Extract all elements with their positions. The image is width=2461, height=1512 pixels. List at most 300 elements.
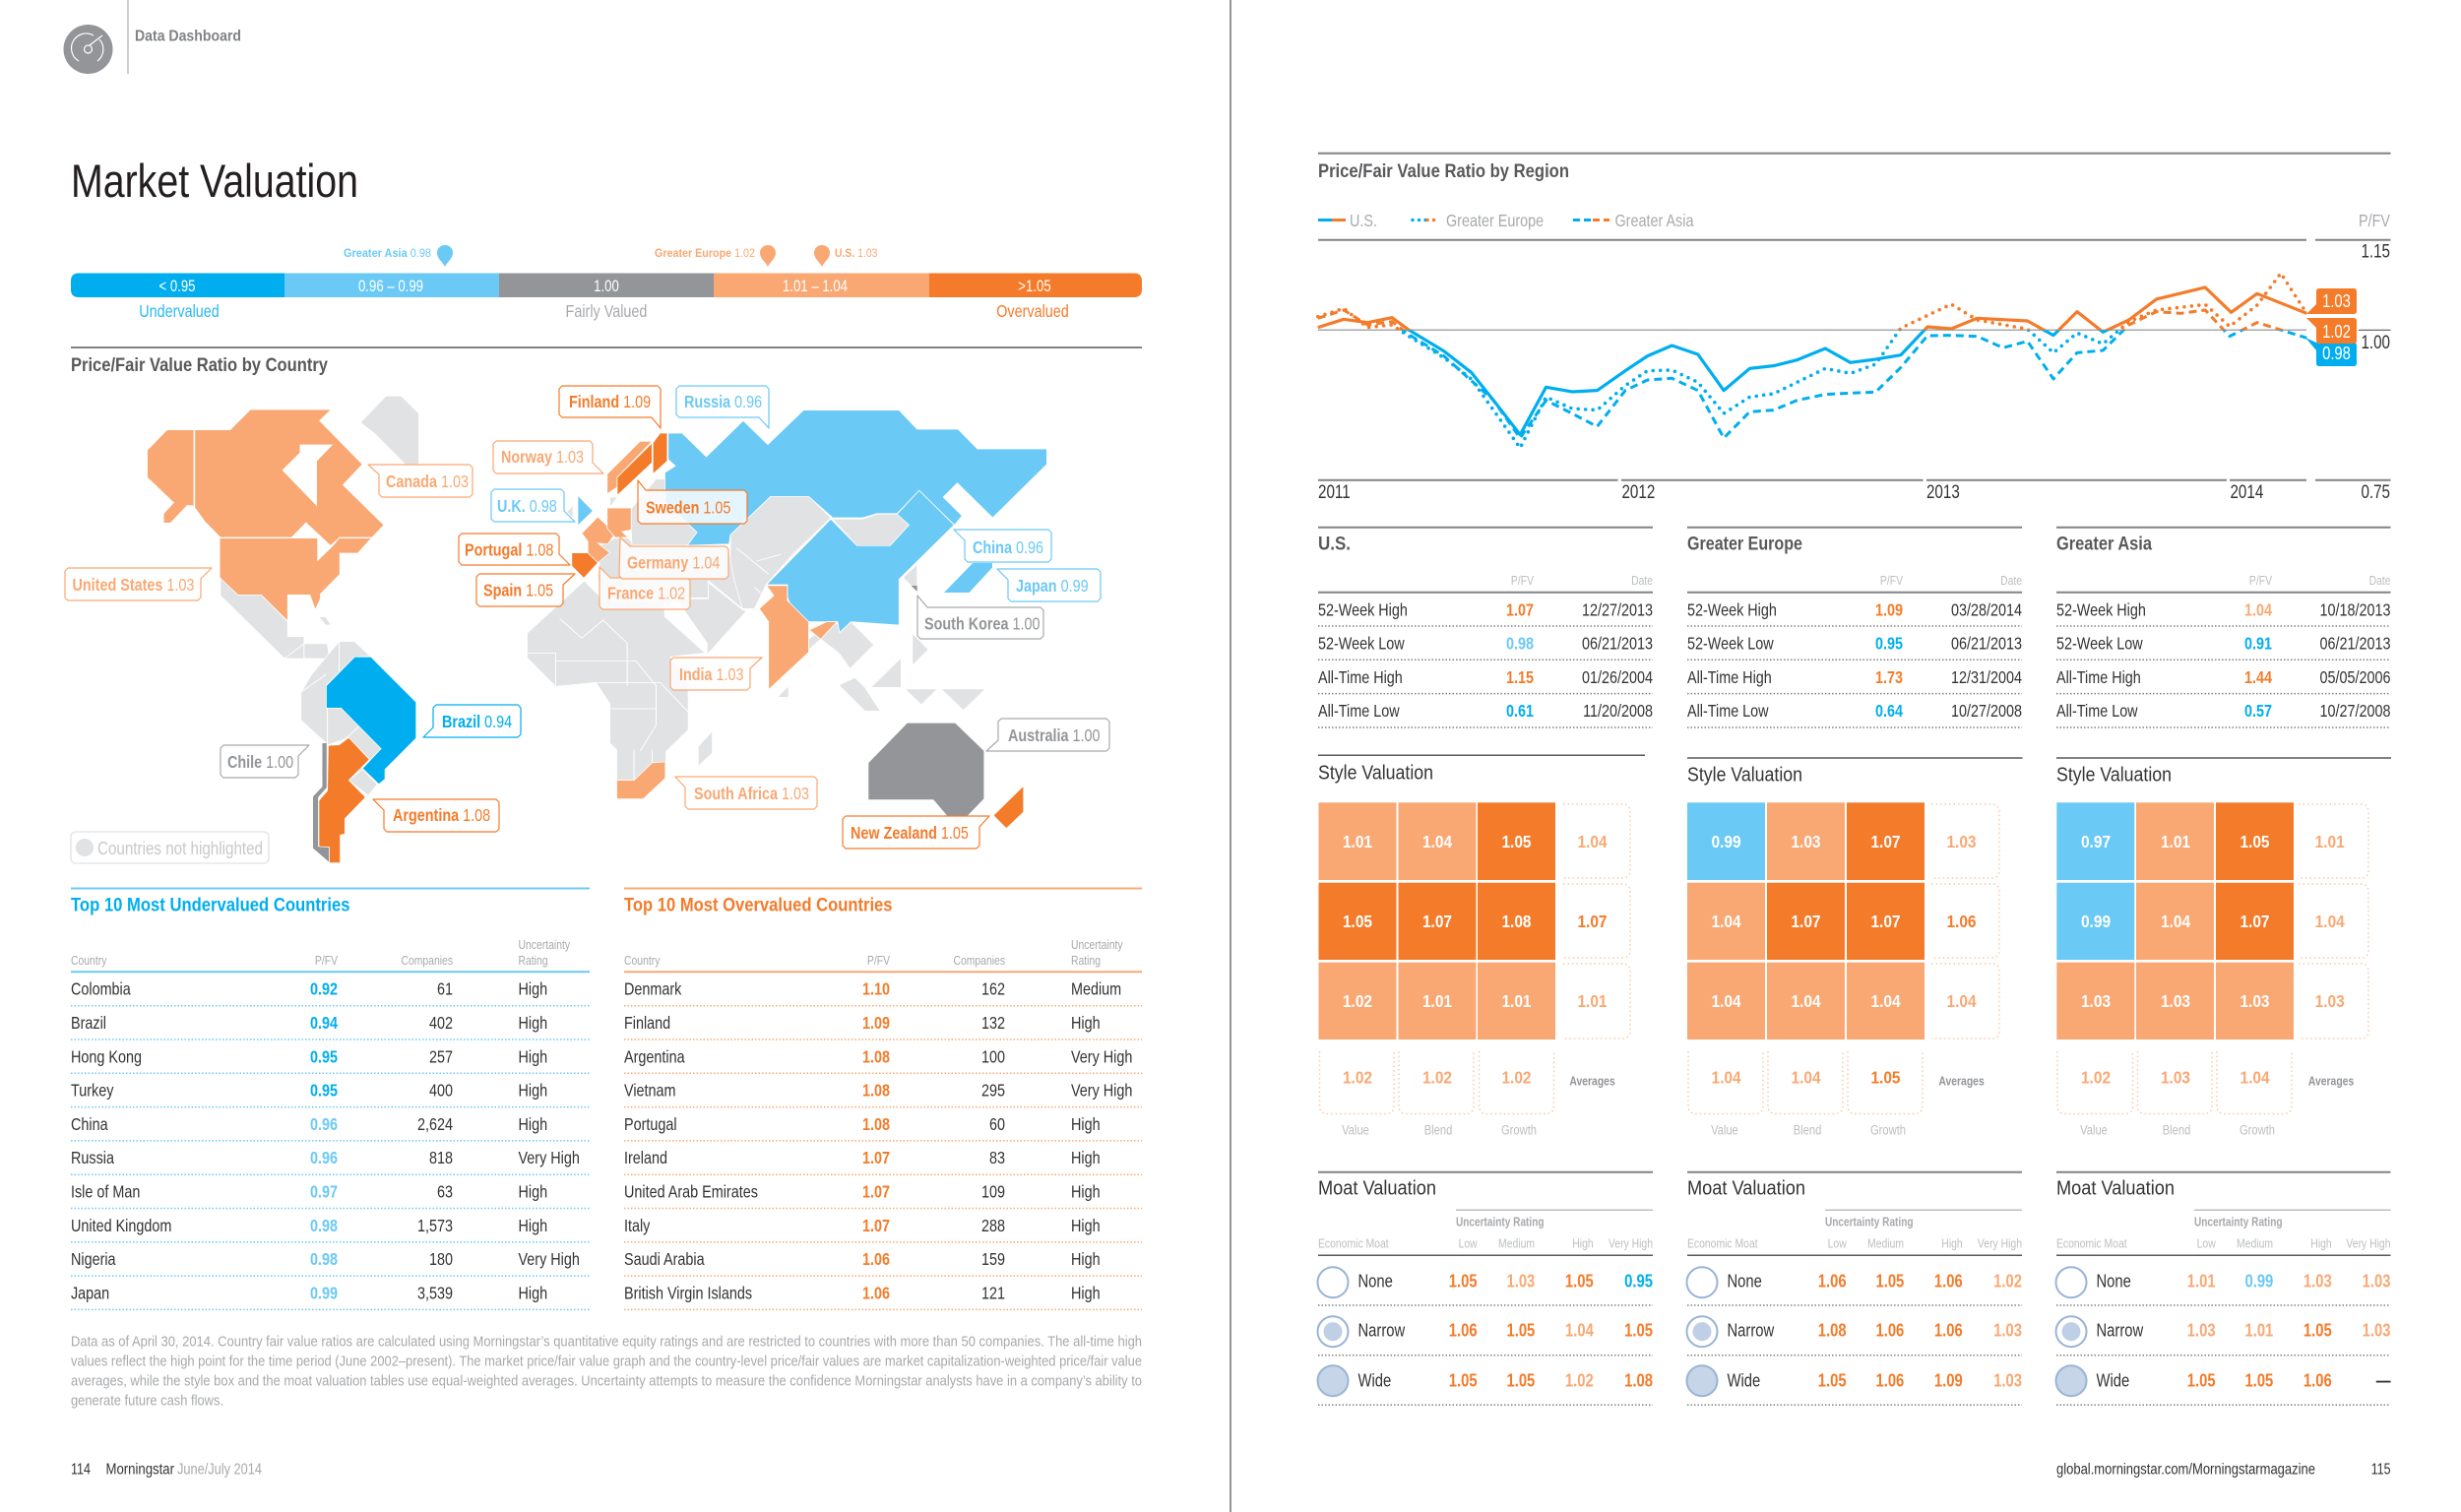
callout: Russia — [676, 386, 769, 428]
axis labels: Growth — [1870, 1122, 1906, 1138]
pin: Greater Asia: Greater Asia 0.98 — [344, 246, 431, 260]
panel: region statistics U.S.: Date — [1631, 574, 1653, 588]
company counts: 2,624 — [417, 1114, 453, 1134]
callout: Spain — [476, 574, 575, 606]
P/FV values: 0.96 — [310, 1149, 338, 1168]
heat map cells: 1.04 — [1871, 991, 1901, 1011]
column averages — [1319, 1051, 1553, 1114]
scale captions: Overvalued — [996, 302, 1069, 321]
axis labels: Blend — [1794, 1122, 1821, 1138]
row averages: 1.03 — [2315, 991, 2345, 1011]
panel: moat valuation Greater Asia: 1.05 — [2187, 1370, 2216, 1391]
heat map cells: 1.08 — [1501, 912, 1532, 931]
panel: moat valuation Greater Europe: 1.06 — [1934, 1320, 1963, 1341]
section label: Data Dashboard — [135, 28, 241, 45]
moat icons — [1317, 1267, 1349, 1396]
axis labels: Value — [1342, 1122, 1369, 1138]
company counts: 162 — [981, 979, 1005, 999]
color bar: 0.96 – 0.99 — [358, 278, 423, 295]
panel: moat valuation Greater Asia: 1.03 — [2363, 1320, 2391, 1341]
footnote: averages, while the style box and the moat valuation tables use equal-weighted averages. Uncertainty attempts to measure the confidence Morningstar analysts have in a company’s ability to — [71, 1372, 1142, 1390]
uncertainty ratings: High — [1071, 1014, 1101, 1033]
column headers: Economic Moat — [1318, 1237, 1389, 1251]
heading: Moat Valuation — [2056, 1177, 2175, 1199]
pin: U.S.: U.S. 1.03 — [835, 246, 878, 260]
row averages: 1.03 — [1946, 832, 1977, 851]
axis labels: Growth — [1501, 1122, 1537, 1138]
panel: region statistics U.S.: 06/21/2013 — [1582, 634, 1653, 654]
axis labels: Growth — [2240, 1122, 2275, 1138]
panel: moat valuation Greater Europe: 1.06 — [1818, 1271, 1847, 1292]
chart legend: Greater Asia — [1614, 212, 1694, 230]
uncertainty ratings: Medium — [1071, 979, 1121, 999]
axis labels: Value — [2080, 1122, 2108, 1138]
heat map cells: 1.04 — [2161, 912, 2191, 931]
heat map cells — [1687, 802, 1925, 1040]
axis labels: Blend — [1424, 1122, 1452, 1138]
callouts — [65, 386, 1109, 849]
x axis labels: 2013 — [1926, 480, 1960, 502]
panel: region statistics U.S.: 11/20/2008 — [1583, 702, 1653, 722]
panel: region statistics Greater Europe — [1687, 528, 2022, 727]
panel: moat valuation Greater Asia: 0.99 — [2244, 1271, 2273, 1292]
panel: moat valuation Greater Asia: 1.05 — [2303, 1320, 2332, 1341]
company counts — [981, 979, 1005, 1303]
panel: moat valuation U.S.: 1.02 — [1565, 1370, 1594, 1391]
panel: region statistics Greater Asia: 05/05/2006 — [2319, 667, 2391, 687]
column averages: 1.04 — [1792, 1068, 1821, 1088]
panel: region statistics Greater Asia: 0.91 — [2244, 634, 2272, 654]
P/FV values: 1.10 — [862, 979, 890, 999]
column averages — [2057, 1051, 2292, 1114]
chart lines — [1318, 274, 2306, 448]
panel: moat valuation Greater Europe: 1.05 — [1818, 1370, 1847, 1391]
panel: region statistics Greater Europe: 52-Week High — [1687, 600, 1777, 620]
map: Americas — [148, 396, 419, 863]
country names: Italy — [624, 1216, 651, 1235]
heat map cells: 1.05 — [1343, 912, 1372, 931]
moat rows — [1358, 1271, 1406, 1391]
title: Market Valuation — [71, 155, 358, 207]
company counts: 121 — [981, 1284, 1005, 1303]
heat map cells: 1.04 — [1712, 912, 1741, 931]
legend: countries not highlighted — [71, 832, 269, 863]
moat rows — [1727, 1271, 1775, 1391]
heat map cells: 1.03 — [2240, 991, 2270, 1011]
column averages: 1.02 — [1501, 1068, 1532, 1088]
heading: U.S. — [1318, 533, 1351, 554]
callout: Australia: Australia 1.00 — [1008, 726, 1101, 745]
P/FV values: 1.07 — [862, 1149, 890, 1168]
panel: region statistics Greater Europe: 1.09 — [1875, 600, 1903, 620]
series below 1.00 — [1396, 330, 2307, 447]
callout: India: India 1.03 — [679, 665, 744, 684]
company counts: 100 — [981, 1047, 1005, 1067]
callout: South Africa: South Africa 1.03 — [694, 785, 809, 803]
heading: Greater Asia — [2056, 533, 2152, 554]
panel: region statistics Greater Asia: P/FV — [2249, 574, 2272, 588]
P/FV values: 1.07 — [862, 1216, 890, 1235]
column headers: Uncertainty — [1071, 938, 1123, 952]
y axis labels: 1.15 — [2361, 240, 2390, 262]
callout: Brazil: Brazil 0.94 — [442, 713, 512, 731]
callout: New Zealand — [843, 816, 989, 849]
panel: region statistics Greater Europe: 10/27/2008 — [1951, 702, 2022, 722]
company counts: 180 — [429, 1250, 453, 1270]
panel: region statistics U.S.: 12/27/2013 — [1582, 600, 1653, 620]
country names: China — [71, 1114, 108, 1134]
P/FV values: 0.95 — [310, 1081, 338, 1101]
icon: gauge — [63, 25, 112, 74]
P/FV values: 0.96 — [310, 1114, 338, 1134]
panel: region statistics Greater Asia: 1.44 — [2244, 667, 2272, 687]
callout: Canada: Canada 1.03 — [386, 472, 469, 491]
axis labels: Averages — [2308, 1075, 2355, 1089]
panel: moat valuation U.S.: 1.05 — [1449, 1370, 1478, 1391]
end value tags — [2305, 288, 2357, 366]
panel: moat valuation U.S.: 0.95 — [1624, 1271, 1653, 1292]
pin: U.S. — [814, 245, 878, 267]
callout: Japan — [997, 569, 1101, 601]
panel: style valuation Greater Asia — [2056, 758, 2461, 1512]
uncertainty ratings: High — [518, 1081, 547, 1101]
row averages: 1.04 — [1578, 832, 1608, 851]
heat map cells: 1.07 — [1870, 912, 1901, 931]
country names: United Kingdom — [71, 1216, 171, 1235]
country names: British Virgin Islands — [624, 1284, 752, 1303]
panel: region statistics Greater Europe: All-Time Low — [1687, 702, 1769, 722]
moat rows: Wide — [2097, 1370, 2129, 1391]
panel: moat valuation Greater Europe — [1687, 1172, 2022, 1405]
column headers: Companies — [401, 954, 453, 968]
country names: Saudi Arabia — [624, 1250, 705, 1270]
column headers: Very High — [2346, 1237, 2391, 1251]
column headers: High — [1941, 1237, 1963, 1251]
panel: region statistics Greater Europe: 12/31/2004 — [1951, 667, 2022, 687]
x axis labels: 2011 — [1318, 480, 1351, 502]
chart legend: P/FV — [2359, 212, 2390, 230]
y axis labels: 1.00 — [2361, 331, 2390, 352]
uncertainty ratings: High — [1071, 1182, 1101, 1202]
panel: moat valuation U.S.: 1.05 — [1449, 1271, 1478, 1292]
callout: France: France 1.02 — [607, 584, 685, 603]
footnote: values reflect the high point for the time period (June 2002–present). The market price/fair value graph and the country-level price/fair values are market capitalization-weighted price/fair value — [71, 1353, 1142, 1370]
country names: Denmark — [624, 979, 682, 999]
uncertainty ratings: High — [518, 1284, 547, 1303]
column headers: Economic Moat — [2056, 1237, 2127, 1251]
moat rows: Narrow — [1728, 1320, 1775, 1341]
country names: Vietnam — [624, 1081, 676, 1101]
panel: region statistics U.S.: 52-Week High — [1318, 600, 1408, 620]
row averages: 1.07 — [1577, 912, 1608, 931]
column headers: Low — [1459, 1237, 1478, 1251]
pin: Greater Asia — [344, 245, 453, 267]
table: top 10 most undervalued countries — [71, 888, 590, 1309]
heading: Style Valuation — [2056, 764, 2172, 786]
callout: South Korea — [917, 596, 1043, 639]
heading: Style Valuation — [1687, 764, 1802, 786]
column headers — [624, 938, 1123, 968]
page header — [63, 0, 241, 74]
country names: Japan — [71, 1284, 109, 1303]
callout: Portugal: Portugal 1.08 — [465, 540, 553, 560]
panel: moat valuation Greater Asia: 1.03 — [2187, 1320, 2216, 1341]
company counts: 818 — [429, 1149, 453, 1168]
panel: moat valuation Greater Asia: 1.01 — [2187, 1271, 2216, 1292]
panel: style valuation Greater Europe — [1687, 758, 2461, 1512]
axis labels: Blend — [2163, 1122, 2190, 1138]
country names: Isle of Man — [71, 1182, 140, 1202]
country names: Turkey — [71, 1081, 114, 1101]
panel: region statistics U.S.: 1.15 — [1506, 667, 1534, 687]
heat map cells: 1.04 — [1792, 991, 1821, 1011]
valuation scale — [71, 245, 1142, 321]
company counts: 400 — [429, 1081, 453, 1101]
uncertainty ratings — [1071, 979, 1132, 1303]
callout: China: China 0.96 — [973, 538, 1043, 557]
uncertainty ratings: High — [518, 1182, 547, 1202]
country names: Argentina — [624, 1047, 685, 1067]
panel: moat valuation Greater Europe: 1.06 — [1934, 1271, 1963, 1292]
heat map cells: 1.07 — [1791, 912, 1821, 931]
column headers: Medium — [2237, 1237, 2273, 1251]
heat map cells: 1.07 — [2240, 912, 2270, 931]
panel: moat valuation Greater Asia: — — [2376, 1370, 2391, 1391]
footer left — [71, 1461, 262, 1479]
column headers — [2056, 1214, 2391, 1251]
P/FV values: 1.06 — [862, 1284, 890, 1303]
P/FV values — [862, 979, 890, 1303]
callout: Chile: Chile 1.00 — [227, 753, 293, 772]
callout: France — [599, 567, 690, 609]
callout: China — [954, 530, 1051, 562]
column headers: Uncertainty Rating — [1456, 1214, 1545, 1228]
column headers: Medium — [1498, 1237, 1535, 1251]
panel: moat valuation Greater Europe: 1.06 — [1875, 1370, 1904, 1391]
panel: region statistics U.S.: 1.07 — [1506, 600, 1534, 620]
uncertainty ratings: High — [518, 979, 547, 999]
callout: U.K. — [491, 489, 575, 522]
heading: Style Valuation — [1318, 763, 1433, 785]
panel: moat valuation U.S.: 1.05 — [1506, 1320, 1535, 1341]
row averages: 1.04 — [2315, 912, 2345, 931]
heat map cells: 0.97 — [2081, 832, 2111, 851]
column headers: P/FV — [867, 954, 890, 968]
callout: Australia — [986, 719, 1109, 751]
moat rows: None — [2097, 1271, 2131, 1292]
heat map cells: 1.02 — [1343, 991, 1372, 1011]
heat map cells: 1.01 — [1422, 991, 1452, 1011]
panel: region statistics U.S.: 0.61 — [1506, 702, 1534, 722]
uncertainty ratings: High — [518, 1114, 547, 1134]
country names — [624, 979, 758, 1303]
row averages — [1563, 804, 1630, 1039]
panel: moat valuation Greater Asia: 1.05 — [2244, 1370, 2273, 1391]
heat map cells: 0.99 — [1711, 832, 1741, 851]
color bar — [71, 274, 1142, 297]
row averages: 1.06 — [1946, 912, 1977, 931]
panel: moat valuation Greater Europe: 1.09 — [1934, 1370, 1963, 1391]
panel: region statistics Greater Asia: All-Time Low — [2056, 702, 2138, 722]
company counts: 61 — [437, 979, 453, 999]
heading: Moat Valuation — [1318, 1177, 1436, 1199]
axis labels — [1342, 1075, 2461, 1512]
callout: Russia: Russia 0.96 — [684, 393, 762, 411]
axis labels — [2080, 1075, 2461, 1512]
panel: region statistics Greater Asia: 0.57 — [2244, 702, 2272, 722]
column headers: P/FV — [315, 954, 338, 968]
axis labels: Value — [1711, 1122, 1738, 1138]
uncertainty ratings — [518, 979, 580, 1303]
column headers: Low — [2197, 1237, 2216, 1251]
column averages: 1.04 — [2240, 1068, 2270, 1088]
uncertainty ratings: High — [1071, 1216, 1101, 1235]
company counts: 1,573 — [417, 1216, 453, 1235]
callout: India — [670, 658, 762, 690]
line chart: price/fair value ratio by region — [1318, 154, 2390, 502]
callout: Chile — [221, 745, 309, 778]
country names: United Arab Emirates — [624, 1182, 758, 1202]
column headers — [1687, 1214, 2022, 1251]
column headers: Country — [624, 954, 660, 968]
axis labels: Averages — [1569, 1075, 1615, 1089]
callout: South Korea: South Korea 1.00 — [924, 614, 1041, 634]
country names: Portugal — [624, 1114, 677, 1134]
axis labels: Averages — [1938, 1075, 1985, 1089]
world map — [65, 386, 1109, 863]
heat map cells: 1.03 — [1791, 832, 1821, 851]
column headers — [1318, 1214, 1653, 1251]
table heading: Top 10 Most Undervalued Countries — [71, 894, 350, 915]
moat icons — [2055, 1267, 2087, 1396]
series above 1.00 — [1316, 274, 2307, 331]
panel: region statistics Greater Asia: 1.04 — [2244, 600, 2272, 620]
country names: Finland — [624, 1014, 670, 1033]
column headers: High — [1572, 1237, 1594, 1251]
chart legend — [1318, 212, 2390, 230]
panel: moat valuation Greater Europe: 1.08 — [1818, 1320, 1847, 1341]
callout: Germany: Germany 1.04 — [627, 553, 720, 573]
company counts: 159 — [981, 1250, 1005, 1270]
callout: Sweden — [638, 480, 747, 524]
callout: United States: United States 1.03 — [73, 576, 194, 595]
company counts: 257 — [429, 1047, 453, 1067]
heat map cells: 1.05 — [2240, 832, 2270, 851]
company counts: 295 — [981, 1081, 1005, 1101]
legend: countries not highlighted: Countries not highlighted — [97, 839, 263, 858]
scale captions: Fairly Valued — [566, 302, 647, 321]
P/FV values: 1.08 — [862, 1047, 890, 1067]
uncertainty ratings: Very High — [518, 1149, 580, 1168]
column averages: 1.02 — [2081, 1068, 2111, 1088]
panel: region statistics U.S.: All-Time High — [1318, 667, 1403, 687]
callout: Portugal — [459, 534, 570, 565]
company counts: 3,539 — [417, 1284, 453, 1303]
column headers: Uncertainty — [518, 938, 570, 952]
heat map cells: 1.05 — [1501, 832, 1532, 851]
country names: Nigeria — [71, 1250, 116, 1270]
map: Eurasia, Africa and Oceania — [528, 410, 1046, 829]
panel: region statistics Greater Asia: All-Time High — [2056, 667, 2141, 687]
footer right: global.morningstar.com/Morningstarmagazine — [2056, 1461, 2315, 1478]
panel: moat valuation Greater Europe: 1.05 — [1875, 1271, 1904, 1292]
uncertainty ratings: Very High — [518, 1250, 580, 1270]
P/FV values: 0.95 — [310, 1047, 338, 1067]
table: top 10 most overvalued countries — [624, 888, 1142, 1309]
panel: region statistics Greater Europe: 03/28/2014 — [1951, 600, 2022, 620]
heat map cells — [2056, 802, 2294, 1040]
P/FV values: 0.97 — [310, 1182, 338, 1202]
panel: region statistics U.S.: 52-Week Low — [1318, 634, 1405, 654]
panel: moat valuation U.S. — [1317, 1172, 1653, 1405]
callout: Brazil — [423, 705, 521, 737]
column headers: Medium — [1867, 1237, 1904, 1251]
moat icons — [1687, 1267, 1717, 1396]
callout: Spain: Spain 1.05 — [483, 581, 553, 600]
country names — [71, 979, 171, 1303]
panel: moat valuation Greater Asia: 1.03 — [2303, 1271, 2332, 1292]
color bar: < 0.95 — [158, 278, 196, 295]
heat map cells: 0.99 — [2081, 912, 2111, 931]
heading: price/fair value by country: Price/Fair Value Ratio by Country — [71, 354, 328, 376]
heading: Greater Europe — [1687, 533, 1802, 554]
color bar: 1.00 — [594, 278, 619, 295]
callout: U.K.: U.K. 0.98 — [497, 497, 557, 516]
P/FV values: 0.92 — [310, 979, 338, 999]
heading: Moat Valuation — [1687, 1177, 1805, 1199]
callout: South Africa — [675, 777, 817, 809]
panel: region statistics Greater Asia: Date — [2369, 574, 2391, 588]
tag: U.S. 1.03: 1.03 — [2322, 290, 2351, 311]
heat map cells: 1.04 — [1422, 832, 1453, 851]
column averages: 1.02 — [1422, 1068, 1452, 1088]
column averages: 1.03 — [2161, 1068, 2190, 1088]
x axis labels: 2012 — [1622, 480, 1655, 502]
moat rows: None — [1728, 1271, 1762, 1292]
x axis labels — [1318, 480, 2264, 502]
heat map cells: 1.07 — [1870, 832, 1901, 851]
color bar: 1.01 – 1.04 — [783, 278, 848, 295]
panel: region statistics Greater Europe: 0.95 — [1875, 634, 1903, 654]
panel: region statistics U.S.: All-Time Low — [1318, 702, 1400, 722]
row averages: 1.01 — [1577, 991, 1608, 1011]
row averages — [2299, 804, 2368, 1039]
uncertainty ratings: High — [1071, 1149, 1101, 1168]
callout: Sweden: Sweden 1.05 — [646, 498, 730, 518]
panel: region statistics U.S.: 01/26/2004 — [1582, 667, 1653, 687]
heat map cells: 1.01 — [1343, 832, 1372, 851]
footer right: 115 — [2371, 1460, 2391, 1478]
panel: region statistics Greater Asia: 10/18/2013 — [2319, 600, 2391, 620]
table heading: Top 10 Most Overvalued Countries — [624, 894, 893, 915]
footer left: Morningstar — [106, 1461, 174, 1479]
company counts: 109 — [981, 1182, 1005, 1202]
column headers: Country — [71, 954, 106, 968]
callout: Argentina: Argentina 1.08 — [393, 806, 490, 825]
country names: Brazil — [71, 1014, 106, 1033]
callout: Norway: Norway 1.03 — [501, 448, 584, 467]
column headers: Uncertainty Rating — [2194, 1214, 2283, 1228]
callout: Germany — [619, 537, 728, 579]
panel: moat valuation Greater Europe: 1.03 — [1993, 1320, 2022, 1341]
panel: region statistics Greater Asia: 06/21/2013 — [2319, 634, 2391, 654]
uncertainty ratings: High — [518, 1014, 547, 1033]
footnote: Data as of April 30, 2014. Country fair value ratios are calculated using Morningstar’s quantitative equity ratings and are restricted to countries with more than 50 companies. The all-time high — [71, 1333, 1142, 1351]
color bar: >1.05 — [1018, 278, 1051, 295]
chart legend: Greater Europe — [1446, 212, 1544, 230]
company counts: 60 — [989, 1114, 1005, 1134]
heat map cells: 1.04 — [1712, 991, 1741, 1011]
